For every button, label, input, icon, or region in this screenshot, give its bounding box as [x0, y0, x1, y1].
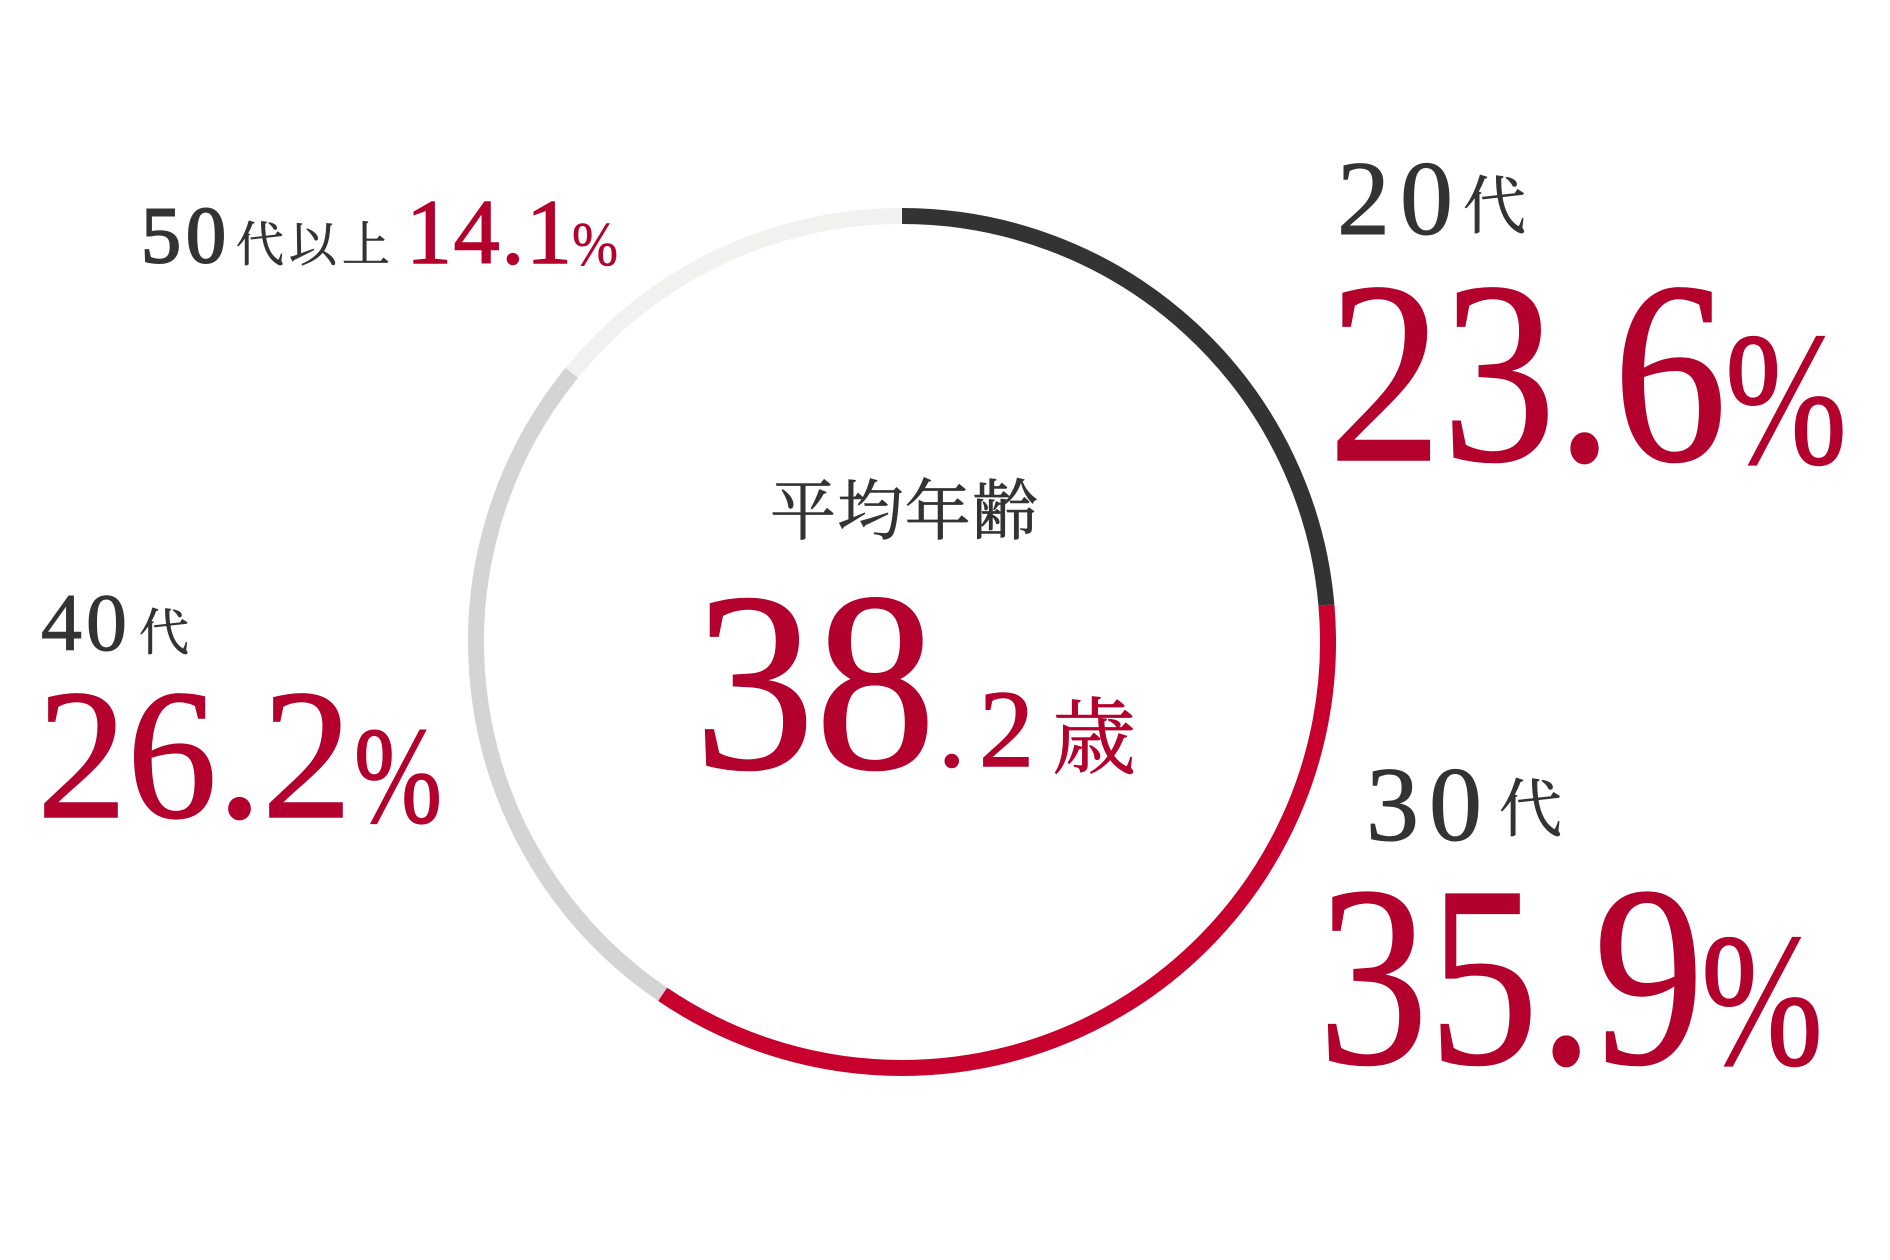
label: 20s: 代: [1463, 172, 1526, 242]
label: 40s: %: [354, 699, 442, 852]
label: 40s: [37, 577, 442, 858]
label: 50s and over: 50: [141, 192, 226, 280]
label: 50s and over: [141, 181, 618, 283]
center value: 38.2 years: .2: [938, 668, 1034, 790]
center value: 38.2 years: [694, 541, 1136, 824]
segment: 50s and over: [572, 216, 902, 373]
label: 30s: 30: [1366, 746, 1482, 863]
label: 40s: 40: [41, 577, 127, 668]
segment: 30s: [663, 605, 1328, 1068]
label: 20s: [1328, 140, 1847, 517]
label: 30s: 代: [1499, 775, 1562, 845]
label: 40s: 代: [139, 605, 189, 661]
label: 30s: 35.9: [1318, 833, 1704, 1119]
segment: 20s: [902, 216, 1326, 605]
label: 40s: 26.2: [37, 652, 352, 858]
donut chart: [476, 216, 1328, 1068]
center value: 38.2 years: 38: [694, 541, 936, 824]
label: 20s: 23.6: [1328, 229, 1727, 517]
label: 30s: %: [1701, 896, 1823, 1106]
segment: 40s: [476, 373, 663, 994]
label: 30s: [1318, 746, 1823, 1119]
center heading: average age: 平均年齢: [770, 476, 1038, 549]
label: 20s: %: [1725, 295, 1847, 505]
label: 50s and over: 代以上: [236, 219, 390, 272]
label: 20s: 20: [1337, 140, 1453, 257]
center value: 38.2 years: 歳: [1052, 693, 1136, 786]
label: 50s and over: %: [572, 211, 618, 279]
label: 50s and over: 14.1: [406, 181, 572, 283]
